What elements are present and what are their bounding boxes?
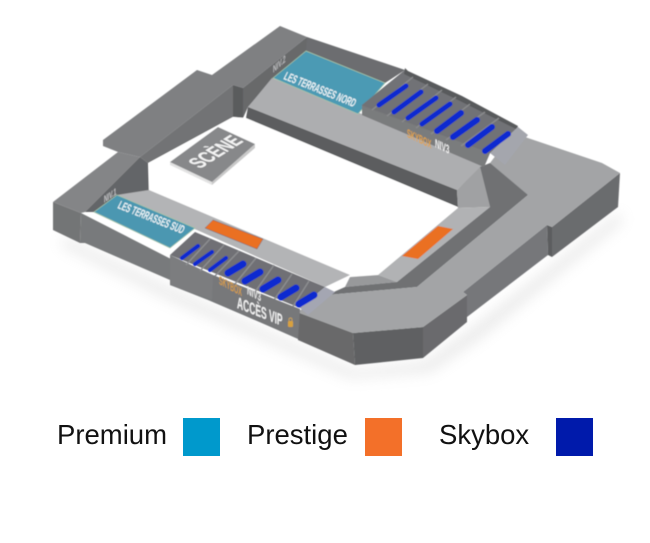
label: niv south: NIV.1 [104,186,117,206]
legend: prestige: Prestige [247,419,348,450]
white arena floor [149,117,457,277]
inner wall by nord terraces [243,37,307,118]
skybox seats [379,86,508,151]
skybox dividers [186,239,309,308]
panel: Premium north terrace [273,37,405,114]
label: skybox sud: SKYBOX [219,273,242,299]
front lip [170,255,213,300]
stadium model [53,26,620,365]
east concourse top surface [297,133,620,333]
label: terrasses sud: LES TERRASSES SUD [116,198,187,237]
legend: premium: Premium [57,419,167,450]
panel: Premium south terrace [94,195,195,248]
east ramp upper [457,167,490,208]
outer side walls [53,173,620,365]
inner wall by sud terraces [85,157,149,212]
panel: Prestige south [205,220,263,249]
icon: lock [288,318,293,327]
skybox south front face [212,275,300,339]
skybox seats [182,246,314,304]
panel: north stand [248,78,490,190]
label: niv3 nord: NIV3 [435,136,450,157]
label: terrasses nord: LES TERRASSES NORD [282,69,359,110]
legend: skybox [439,418,593,456]
east stand [378,207,490,282]
east dark band [327,163,528,295]
north stand dark wall [246,107,458,207]
legend: prestige [247,418,402,456]
upper-left wing top surface [103,26,307,157]
panel: stage [170,127,255,185]
label: niv3 sud: NIV3 [247,283,261,305]
skybox dividers [372,77,499,146]
panel: south skybox [170,232,335,315]
label: skybox nord: SKYBOX [407,126,431,152]
south-east ramp [345,275,397,287]
wing end face [233,85,243,118]
label: niv north: NIV.2 [273,53,286,76]
label: scene: SCÈNE [182,132,249,171]
drop shadow [62,212,622,378]
panel: south strip [117,190,350,287]
panel: Prestige east [402,226,453,259]
panel: north skybox [362,68,528,167]
legend: premium [57,418,220,456]
left corner top surface [53,152,140,213]
legend [57,418,593,456]
legend: skybox: Skybox [439,419,529,450]
wing inner face [140,85,233,163]
label: acces vip: ACCÈS VIP [237,293,283,330]
